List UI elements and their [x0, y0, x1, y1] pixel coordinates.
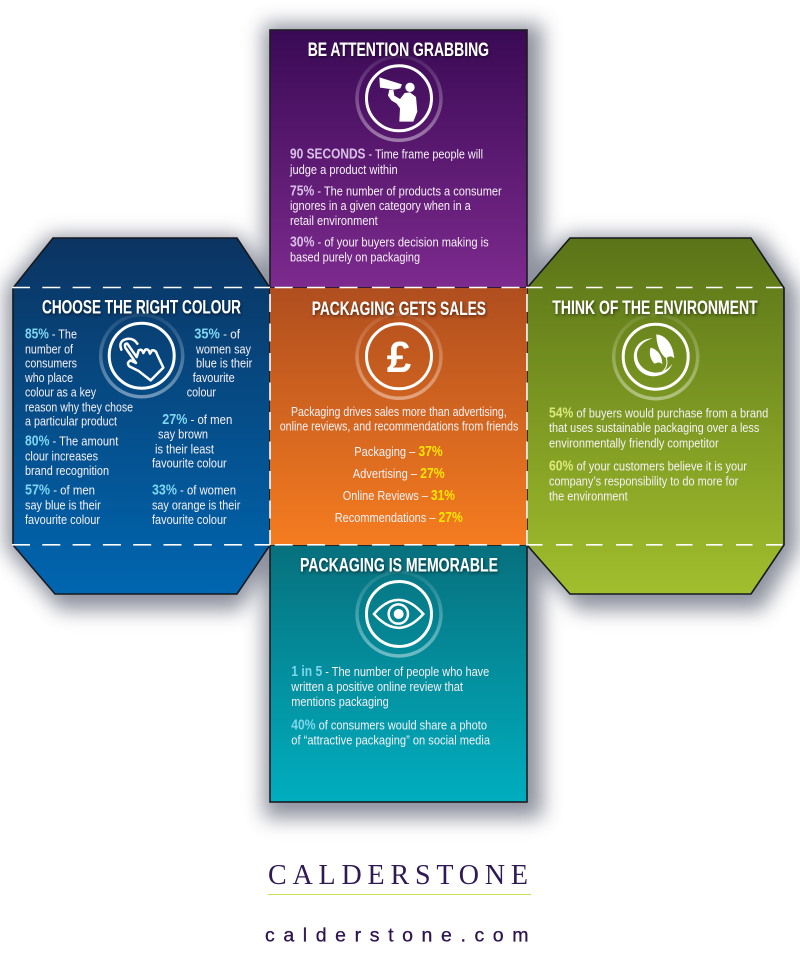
left column statistics	[24, 327, 133, 527]
bottom panel statistics: mentions packaging	[291, 694, 389, 709]
bottom panel statistics: 1 in 5 - The number of people who have	[291, 664, 489, 680]
icon: leaves	[614, 315, 698, 399]
right column statistics: 27% - of men	[162, 412, 232, 428]
centre panel sales percentages: Recommendations – 27%	[335, 510, 463, 526]
bottom panel heading: PACKAGING IS MEMORABLE	[300, 556, 498, 577]
top panel statistics: retail environment	[290, 213, 378, 228]
right panel statistics	[549, 405, 768, 504]
centre panel sales percentages: Advertising – 27%	[353, 466, 445, 482]
right column statistics	[152, 327, 253, 527]
right column statistics: favourite colour	[152, 512, 227, 527]
right column statistics: colour	[187, 385, 216, 400]
left column statistics: favourite colour	[25, 512, 100, 527]
centre panel sales percentages: Packaging – 37%	[354, 444, 443, 460]
bottom panel statistics: written a positive online review that	[290, 679, 463, 694]
top panel statistics: based purely on packaging	[290, 249, 420, 264]
top panel statistics: judge a product within	[289, 162, 398, 177]
top panel statistics: ignores in a given category when in a	[290, 198, 471, 213]
top panel heading: BE ATTENTION GRABBING	[308, 40, 489, 61]
centre panel intro text	[280, 404, 519, 434]
icon: pound sign	[357, 314, 441, 398]
centre panel shape	[270, 288, 527, 545]
bottom panel statistics	[290, 664, 491, 747]
centre panel heading: PACKAGING GETS SALES	[312, 299, 486, 320]
right column statistics: blue is their	[196, 356, 253, 371]
right panel statistics: company’s responsibility to do more for	[549, 474, 739, 489]
top panel statistics	[289, 147, 502, 264]
website address: calderstone.com	[265, 925, 528, 947]
centre panel intro text: Packaging drives sales more than advertising,	[291, 404, 507, 419]
right panel statistics: 60% of your customers believe it is your	[549, 459, 748, 475]
right column statistics: women say	[195, 341, 251, 356]
right column statistics: favourite	[193, 370, 235, 385]
left panel shape	[13, 238, 270, 594]
top panel statistics: 75% - The number of products a consumer	[290, 183, 502, 199]
top panel shape	[270, 30, 527, 288]
centre panel sales percentages: Online Reviews – 31%	[343, 488, 455, 504]
right panel statistics: that uses sustainable packaging over a less	[549, 420, 760, 435]
left column statistics: who place	[24, 370, 73, 385]
logo underline	[268, 894, 531, 895]
right panel statistics: 54% of buyers would purchase from a brand	[549, 405, 768, 421]
left column statistics: 57% - of men	[25, 483, 95, 499]
left column statistics: 80% - The amount	[25, 434, 119, 450]
left column statistics: 85% - The	[25, 327, 77, 343]
right column statistics: favourite colour	[152, 456, 227, 471]
panel: packaging is memorable	[270, 545, 527, 802]
left column statistics: brand recognition	[25, 463, 109, 478]
panel: packaging gets sales	[270, 288, 527, 545]
centre panel sales percentages	[335, 444, 463, 526]
icon: eye	[357, 572, 441, 656]
bottom panel shape	[270, 545, 527, 802]
logo: Calderstone wordmark: CALDERSTONE	[268, 860, 528, 891]
left column statistics: reason why they chose	[25, 399, 133, 414]
top panel statistics: 90 SECONDS - Time frame people will	[290, 147, 483, 163]
icon: pointing hand	[101, 315, 183, 397]
bottom panel statistics: of “attractive packaging” on social media	[291, 732, 491, 747]
right panel statistics: environmentally friendly competitor	[549, 435, 719, 450]
right panel statistics: the environment	[549, 489, 628, 504]
right column statistics: say brown	[158, 427, 208, 442]
top panel statistics: 30% - of your buyers decision making is	[290, 235, 489, 251]
left column statistics: a particular product	[25, 414, 117, 429]
centre panel intro text: online reviews, and recommendations from friends	[280, 419, 519, 434]
left panel heading: CHOOSE THE RIGHT COLOUR	[42, 297, 241, 318]
right column statistics: 35% - of	[194, 327, 240, 343]
panel: think of the environment	[527, 238, 784, 594]
left column statistics: colour as a key	[25, 385, 96, 400]
icon: pound sign: £	[387, 333, 412, 382]
left column statistics: say blue is their	[25, 497, 101, 512]
left column statistics: consumers	[25, 356, 77, 371]
right column statistics: say orange is their	[152, 497, 241, 512]
right column statistics: is their least	[155, 441, 214, 456]
left column statistics: number of	[25, 341, 73, 356]
left column statistics: clour increases	[25, 448, 98, 463]
icon: man with megaphone	[357, 56, 441, 140]
panel: be attention grabbing	[270, 30, 527, 288]
panel: choose the right colour	[13, 238, 270, 594]
right panel shape	[527, 238, 784, 594]
right column statistics: 33% - of women	[152, 483, 236, 499]
bottom panel statistics: 40% of consumers would share a photo	[291, 717, 487, 733]
